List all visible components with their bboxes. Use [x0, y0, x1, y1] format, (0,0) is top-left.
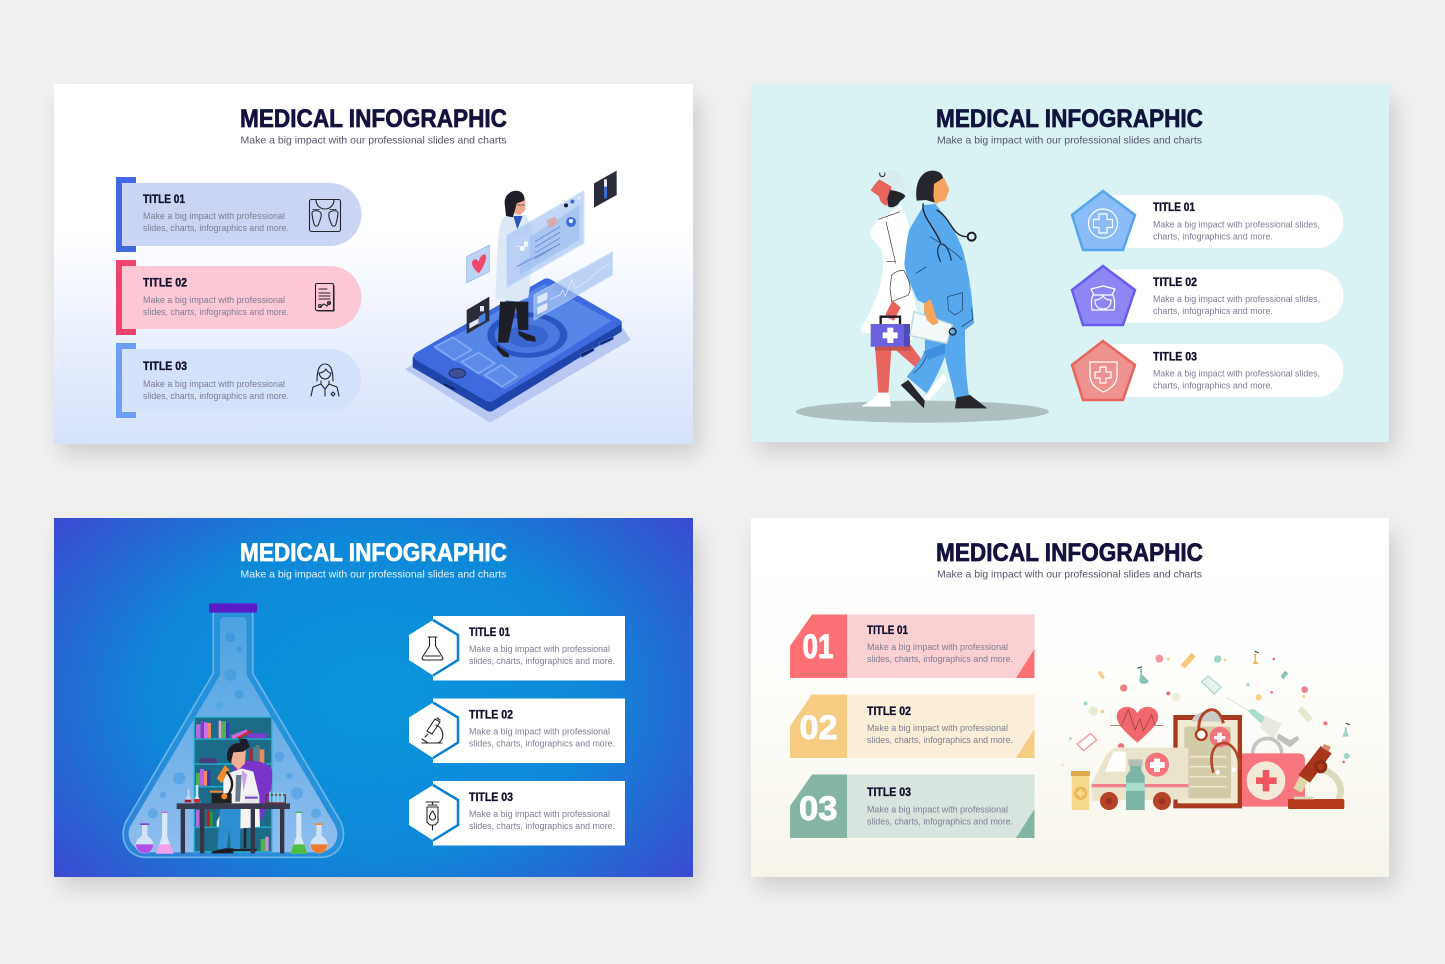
- card: title 03: [119, 346, 361, 415]
- icon: medical report: [316, 284, 334, 311]
- nurse: [860, 170, 947, 407]
- microscope: [1288, 744, 1344, 809]
- phone: [405, 278, 631, 423]
- heading: MEDICAL INFOGRAPHIC: [240, 539, 507, 567]
- flask: [123, 603, 344, 857]
- heading: MEDICAL INFOGRAPHIC: [936, 539, 1203, 567]
- subheading: Make a big impact with our professional slides and charts: [937, 568, 1202, 580]
- icon: microscope: [422, 718, 443, 743]
- ground shadow: [796, 401, 1049, 423]
- doctor in blue: [901, 171, 987, 408]
- card: title 02: slides, charts, infographics and more.: [469, 738, 615, 748]
- subheading: Make a big impact with our professional slides and charts: [240, 134, 506, 146]
- card: 03: TITLE 03: [867, 785, 911, 799]
- icon: iv bag: [426, 802, 439, 830]
- card: 01: TITLE 01: [867, 623, 908, 637]
- card: 01: 01: [802, 628, 834, 666]
- card: title 02: Make a big impact with professional: [143, 295, 285, 305]
- card: title 01: slides, charts, infographics and more.: [469, 656, 615, 666]
- item: title 01: charts, infographics and more.: [1153, 232, 1273, 242]
- card: title 01: [409, 616, 625, 680]
- card: title 03: slides, charts, infographics and more.: [469, 821, 615, 831]
- heart monitor: [1110, 707, 1163, 743]
- card: 02: Make a big impact with professional: [867, 723, 1008, 733]
- glass screens: [507, 191, 613, 320]
- subheading: Make a big impact with our professional slides and charts: [937, 134, 1202, 146]
- card: title 02: [409, 698, 625, 763]
- icon: doctor: [311, 364, 339, 396]
- card: 01: slides, charts, infographics and more.: [867, 654, 1013, 664]
- item: title 02: Make a big impact with professional slides,: [1153, 294, 1320, 304]
- card: title 02: Make a big impact with professional: [469, 726, 610, 736]
- panel: bottom-left flask infographic: [54, 518, 699, 887]
- item: title 02: charts, infographics and more.: [1153, 306, 1273, 316]
- card: 03: slides, charts, infographics and more.: [867, 816, 1013, 826]
- card: title 02: TITLE 02: [469, 708, 513, 722]
- card: title 01: Make a big impact with professional: [469, 644, 610, 654]
- card: title 02: [119, 263, 362, 332]
- card: 01: Make a big impact with professional: [867, 642, 1008, 652]
- icon: foot scale: [310, 200, 340, 232]
- card: title 03: Make a big impact with professional: [469, 809, 610, 819]
- heart card: [467, 245, 489, 283]
- card: title 02: slides, charts, infographics and more.: [143, 307, 289, 317]
- subheading: Make a big impact with our professional slides and charts: [240, 568, 506, 580]
- card: title 02: TITLE 02: [143, 276, 187, 290]
- panel: top-right doctors infographic: [751, 84, 1395, 452]
- dark card: medicine: [467, 297, 489, 334]
- card: 01: [790, 614, 1034, 678]
- jar: [1071, 771, 1090, 810]
- item: title 02: TITLE 02: [1153, 275, 1197, 289]
- item: title 01: [1072, 191, 1344, 250]
- card: title 03: Make a big impact with professional: [143, 379, 285, 389]
- syringe: [1227, 697, 1299, 747]
- item: title 02: [1072, 266, 1344, 325]
- item: title 03: TITLE 03: [1153, 350, 1197, 364]
- card: 02: slides, charts, infographics and more.: [867, 735, 1013, 745]
- card: title 01: TITLE 01: [143, 192, 185, 206]
- card: 02: TITLE 02: [867, 704, 911, 718]
- heading: MEDICAL INFOGRAPHIC: [936, 105, 1203, 133]
- panel: bottom-right numbered infographic: [751, 518, 1395, 887]
- bottle: [1126, 759, 1145, 810]
- card: 03: [790, 774, 1034, 838]
- medical case: [1242, 738, 1305, 807]
- panel: top-left phone infographic: [54, 84, 699, 454]
- illustration: nurse and doctor walking: [796, 170, 1049, 423]
- card: title 01: Make a big impact with professional: [143, 211, 285, 221]
- illustration: medical equipment: [1061, 651, 1350, 810]
- doctor figure: [495, 191, 536, 357]
- item: title 01: Make a big impact with professional slides,: [1153, 220, 1320, 230]
- clipboard: [910, 307, 956, 343]
- medical bag: [871, 317, 912, 351]
- card: title 01: [119, 180, 362, 249]
- card: 02: 02: [800, 709, 838, 747]
- card: title 01: slides, charts, infographics and more.: [143, 223, 289, 233]
- card: title 03: TITLE 03: [469, 790, 513, 804]
- illustration: doctor on smartphone: [405, 171, 631, 423]
- item: title 03: charts, infographics and more.: [1153, 380, 1273, 390]
- card: 02: [790, 694, 1034, 758]
- desk: [177, 785, 290, 853]
- card: title 03: TITLE 03: [143, 359, 187, 373]
- heading: MEDICAL INFOGRAPHIC: [240, 105, 507, 133]
- card: title 03: slides, charts, infographics and more.: [143, 391, 289, 401]
- item: title 01: TITLE 01: [1153, 200, 1195, 214]
- icon: medical cross: [1088, 209, 1118, 238]
- card: 03: 03: [799, 790, 838, 828]
- item: title 03: Make a big impact with professional slides,: [1153, 368, 1320, 378]
- icon: flask: [422, 637, 443, 660]
- clipboard and stethoscope: [1173, 710, 1242, 808]
- ambulance: [1092, 743, 1188, 810]
- bookshelf: [194, 717, 272, 852]
- dark card: test tube: [594, 171, 617, 208]
- scientist: [210, 738, 272, 853]
- confetti: [1061, 651, 1350, 766]
- flasks: [136, 812, 328, 854]
- card: 03: Make a big impact with professional: [867, 804, 1008, 814]
- item: title 03: [1072, 341, 1344, 400]
- illustration: scientist in flask: [123, 603, 344, 857]
- icon: nurse face: [1091, 286, 1115, 310]
- card: title 01: TITLE 01: [469, 625, 510, 639]
- icon: shield: [1090, 362, 1117, 392]
- card: title 03: [409, 781, 625, 846]
